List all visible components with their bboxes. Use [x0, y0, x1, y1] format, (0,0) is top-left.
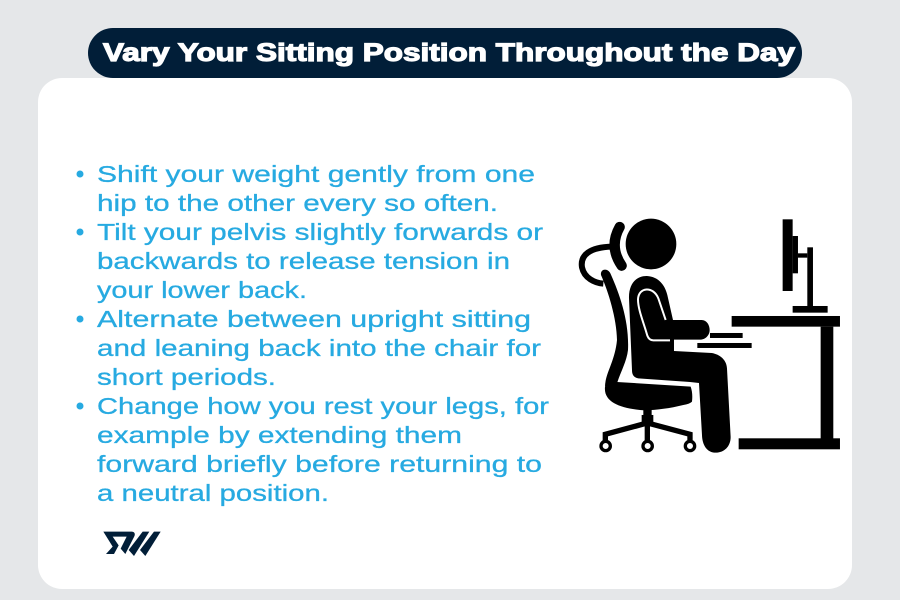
bullet list: Shift your weight gently from one: [97, 161, 535, 187]
logo: [103, 532, 161, 556]
headrest support: [582, 247, 612, 284]
bullet list: Change how you rest your legs, for: [97, 393, 549, 419]
body: [629, 276, 731, 453]
chair base: [601, 408, 695, 451]
chair seat: [605, 382, 692, 410]
bullet list: hip to the other every so often.: [97, 190, 498, 216]
chair back: [601, 270, 628, 387]
bullet list: a neutral position.: [97, 480, 329, 506]
chair headrest: [615, 227, 622, 266]
bullet list: your lower back.: [97, 277, 307, 303]
bullet list: [76, 161, 549, 506]
head: [626, 219, 676, 269]
bullet list: example by extending them: [97, 422, 462, 448]
title banner: [88, 28, 802, 78]
bullet list: Alternate between upright sitting: [97, 306, 531, 332]
monitor: [783, 219, 828, 313]
bullet list: forward briefly before returning to: [97, 451, 542, 477]
bullet list: backwards to release tension in: [97, 248, 510, 274]
keyboard: [697, 333, 752, 348]
bullet list: short periods.: [97, 364, 276, 390]
arm outline: [638, 289, 670, 340]
white content panel: [38, 78, 852, 589]
desk: [732, 316, 840, 449]
bullet list: and leaning back into the chair for: [97, 335, 541, 361]
title banner: Vary Your Sitting Position Throughout the Day: [103, 39, 795, 67]
icon: person sitting at desk: [582, 219, 840, 453]
bullet list: Tilt your pelvis slightly forwards or: [97, 219, 543, 245]
